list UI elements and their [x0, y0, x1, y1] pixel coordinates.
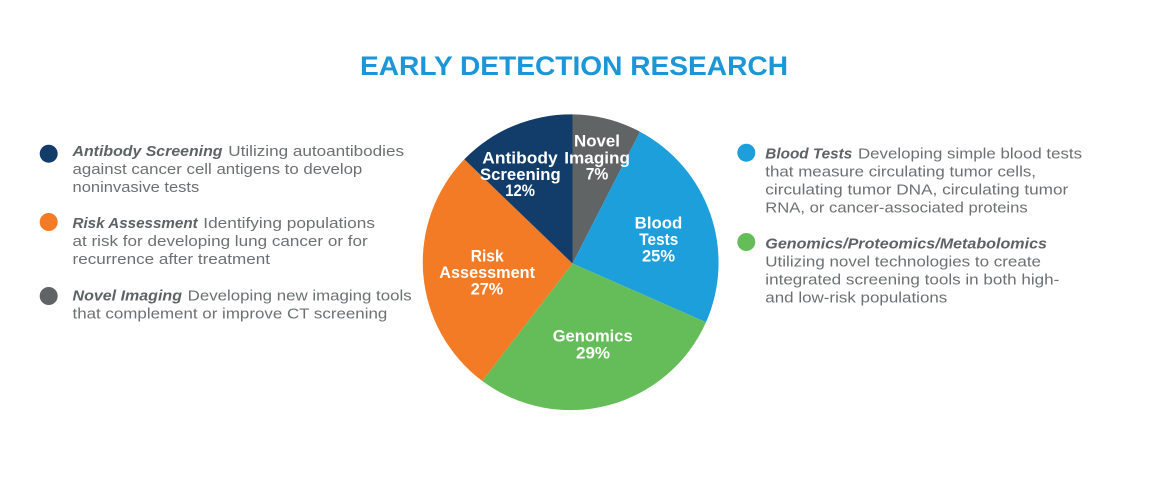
- label: genomics: 29%: [576, 344, 610, 362]
- legend item: risk assessment: [40, 213, 375, 268]
- panel: right legend: [737, 144, 1082, 306]
- label: antibody screening: 12%: [505, 182, 535, 200]
- legend item: blood tests: that measure circulating tumor cells,: [765, 163, 1036, 180]
- legend item: genomics/proteomics/metabolomics: integrated screening tools in both high-: [765, 271, 1059, 288]
- title: EARLY DETECTION RESEARCH: [360, 51, 788, 81]
- label: risk assessment: 27%: [471, 280, 504, 298]
- legend item: antibody screening: Utilizing autoantibodies: [228, 143, 404, 160]
- legend item: blood tests: Developing simple blood tests: [858, 145, 1082, 162]
- legend item: novel imaging: [40, 287, 412, 322]
- legend item: risk assessment: at risk for developing lung cancer or for: [72, 233, 368, 250]
- legend item: genomics/proteomics/metabolomics: and low-risk populations: [765, 289, 947, 306]
- label: novel imaging: 7%: [586, 165, 609, 183]
- label: blood tests: [635, 215, 682, 265]
- slice: blood tests 25%: [572, 132, 719, 322]
- label: blood tests: Tests: [639, 231, 678, 249]
- label: genomics: [553, 328, 633, 362]
- legend item: risk assessment: Risk Assessment: [72, 215, 199, 232]
- label: genomics: Genomics: [553, 328, 633, 346]
- label: novel imaging: [564, 133, 630, 183]
- label: novel imaging: Imaging: [564, 149, 630, 167]
- legend item: antibody screening: Antibody Screening: [71, 143, 223, 160]
- legend item: genomics/proteomics/metabolomics: [737, 233, 1059, 306]
- legend item: novel imaging: Novel Imaging: [72, 287, 182, 304]
- legend item: risk assessment: recurrence after treatment: [72, 251, 271, 268]
- label: antibody screening: Screening: [480, 166, 561, 184]
- label: risk assessment: Risk: [471, 248, 504, 266]
- legend item: blood tests: Blood Tests: [765, 145, 852, 162]
- slice: risk assessment 27%: [423, 159, 572, 381]
- legend item: antibody screening: against cancer cell antigens to develop: [72, 161, 362, 178]
- label: blood tests: 25%: [642, 247, 675, 265]
- legend item: blood tests: [737, 144, 1082, 216]
- label: novel imaging: Novel: [574, 133, 620, 151]
- legend item: novel imaging: Developing new imaging tools: [188, 287, 412, 304]
- legend item: genomics/proteomics/metabolomics: Utilizing novel technologies to create: [765, 253, 1041, 270]
- legend item: antibody screening: [40, 143, 404, 196]
- label: antibody screening: Antibody: [482, 149, 559, 167]
- slice: novel imaging 7%: [572, 114, 640, 264]
- label: antibody screening: [480, 149, 561, 200]
- slice: antibody screening 12%: [464, 114, 572, 264]
- legend item: blood tests: RNA, or cancer-associated proteins: [765, 199, 1028, 216]
- pie chart: [423, 114, 719, 410]
- label: blood tests: Blood: [635, 215, 682, 233]
- legend item: antibody screening: noninvasive tests: [72, 179, 199, 196]
- label: risk assessment: [439, 248, 535, 298]
- legend item: risk assessment: Identifying populations: [203, 215, 375, 232]
- panel: left legend: [40, 143, 412, 322]
- legend item: blood tests: circulating tumor DNA, circulating tumor: [765, 181, 1068, 198]
- slice: genomics 29%: [482, 264, 706, 410]
- legend item: genomics/proteomics/metabolomics: Genomics/Proteomics/Metabolomics: [765, 235, 1047, 252]
- legend item: novel imaging: that complement or improve CT screening: [72, 305, 387, 322]
- label: risk assessment: Assessment: [439, 264, 535, 282]
